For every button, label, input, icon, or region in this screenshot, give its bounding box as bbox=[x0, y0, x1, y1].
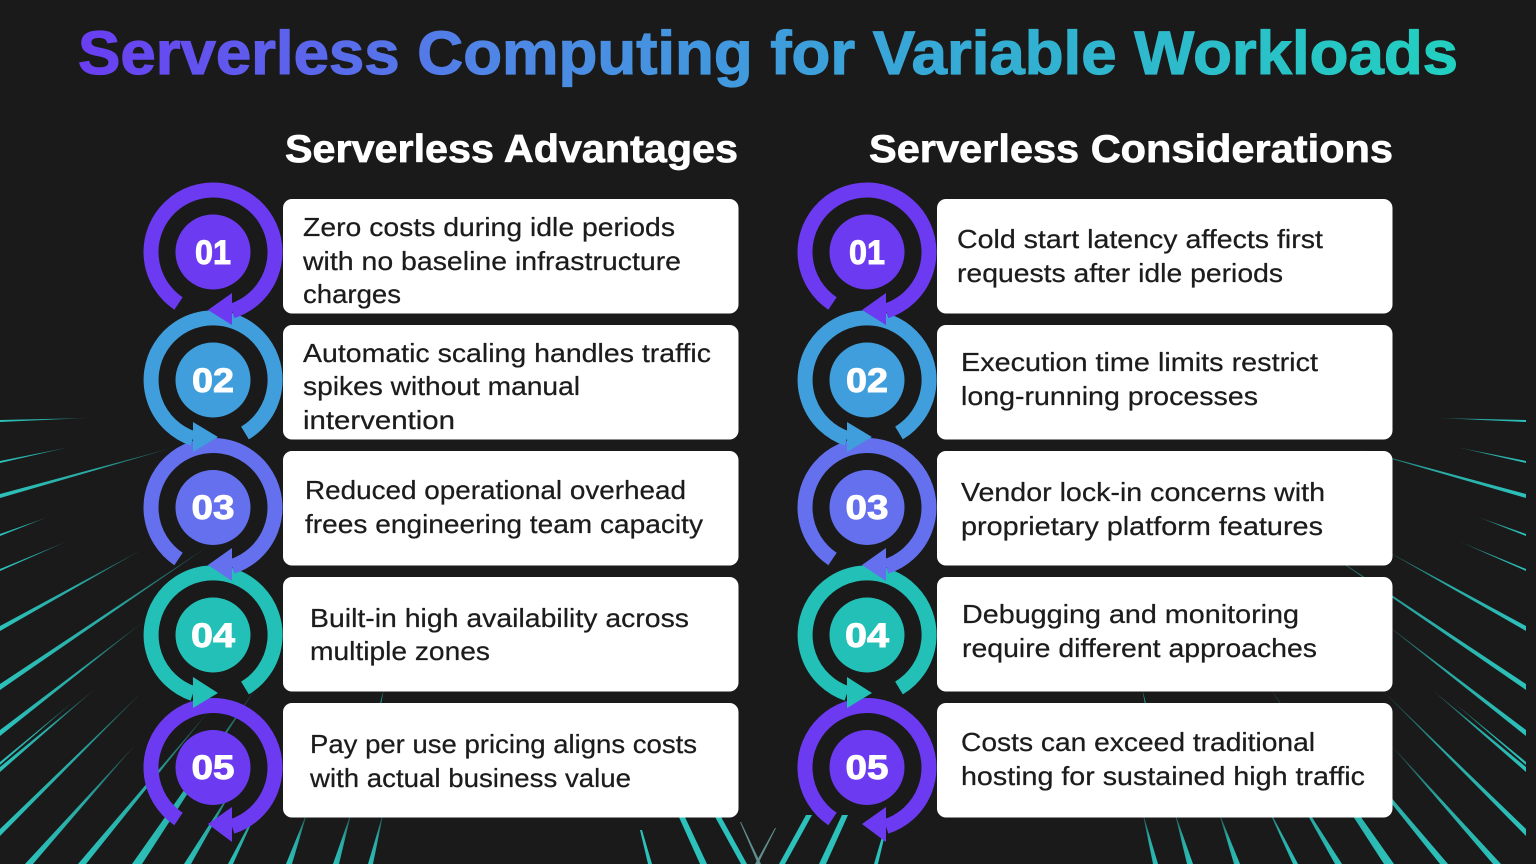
advantage card 03 bbox=[283, 451, 738, 566]
title: Serverless Computing for Variable Workloads bbox=[78, 19, 1458, 87]
consideration card 04: require different approaches bbox=[962, 633, 1317, 663]
consideration card 05: Costs can exceed traditional bbox=[961, 727, 1315, 757]
ring 03 bbox=[805, 445, 929, 581]
advantage card 02: spikes without manual bbox=[303, 371, 580, 401]
ring 05 bbox=[805, 705, 929, 842]
consideration card 02 bbox=[937, 325, 1392, 440]
heading: Serverless Considerations: Serverless Considerations bbox=[869, 128, 1393, 171]
consideration card 01: Cold start latency affects first bbox=[957, 224, 1324, 254]
left ring stack bbox=[151, 190, 275, 842]
ring 05: 05 bbox=[846, 749, 888, 787]
ring 01: 01 bbox=[849, 234, 885, 272]
radiating teal rays, left side bbox=[0, 418, 747, 864]
consideration card 04: Debugging and monitoring bbox=[962, 599, 1299, 629]
ring 01 bbox=[151, 190, 275, 325]
consideration card 01: requests after idle periods bbox=[957, 258, 1283, 288]
consideration card 05: hosting for sustained high traffic bbox=[961, 761, 1365, 791]
ring 02: 02 bbox=[846, 362, 888, 400]
thin crossing rays at bottom centre bbox=[740, 822, 776, 864]
heading: Serverless Advantages: Serverless Advantages bbox=[285, 128, 738, 171]
advantage card 05: Pay per use pricing aligns costs bbox=[310, 729, 697, 759]
consideration card 01 bbox=[937, 199, 1392, 314]
consideration card 03: Vendor lock-in concerns with bbox=[961, 477, 1325, 507]
ring 01: 01 bbox=[195, 234, 231, 272]
ring 02: 02 bbox=[192, 362, 234, 400]
ring 04: 04 bbox=[845, 617, 889, 655]
advantage card 01: charges bbox=[303, 279, 401, 309]
ring 02 bbox=[805, 318, 929, 452]
advantage card 03: Reduced operational overhead bbox=[305, 475, 686, 505]
ring 05: 05 bbox=[192, 749, 234, 787]
consideration card 04 bbox=[937, 577, 1392, 692]
consideration card 03 bbox=[937, 451, 1392, 566]
advantage card 01: with no baseline infrastructure bbox=[302, 246, 681, 276]
ring 02 bbox=[151, 318, 275, 452]
consideration card 03: proprietary platform features bbox=[961, 511, 1323, 541]
consideration card 02: long-running processes bbox=[961, 381, 1258, 411]
radiating teal rays, right side bbox=[779, 418, 1526, 864]
ring 03: 03 bbox=[192, 489, 234, 527]
consideration card 02: Execution time limits restrict bbox=[961, 347, 1319, 377]
right ring stack bbox=[805, 190, 929, 842]
advantage card 02 bbox=[283, 325, 738, 440]
ring 04: 04 bbox=[191, 617, 235, 655]
ring 04 bbox=[151, 573, 275, 708]
advantage card 04: Built-in high availability across bbox=[310, 603, 689, 633]
advantage card 05 bbox=[283, 703, 738, 818]
ring 04 bbox=[805, 573, 929, 708]
ring 03 bbox=[151, 445, 275, 581]
advantage card 04 bbox=[283, 577, 738, 692]
ring 03: 03 bbox=[846, 489, 888, 527]
consideration card 05 bbox=[937, 703, 1392, 818]
ring 05 bbox=[151, 705, 275, 842]
advantage card 01: Zero costs during idle periods bbox=[303, 212, 675, 242]
advantage card 02: Automatic scaling handles traffic bbox=[303, 338, 711, 368]
advantage card 04: multiple zones bbox=[310, 636, 490, 666]
ring 01 bbox=[805, 190, 929, 325]
advantage card 05: with actual business value bbox=[309, 763, 631, 793]
advantage card 03: frees engineering team capacity bbox=[305, 509, 703, 539]
advantage card 02: intervention bbox=[303, 405, 455, 435]
advantage card 01 bbox=[283, 199, 738, 314]
